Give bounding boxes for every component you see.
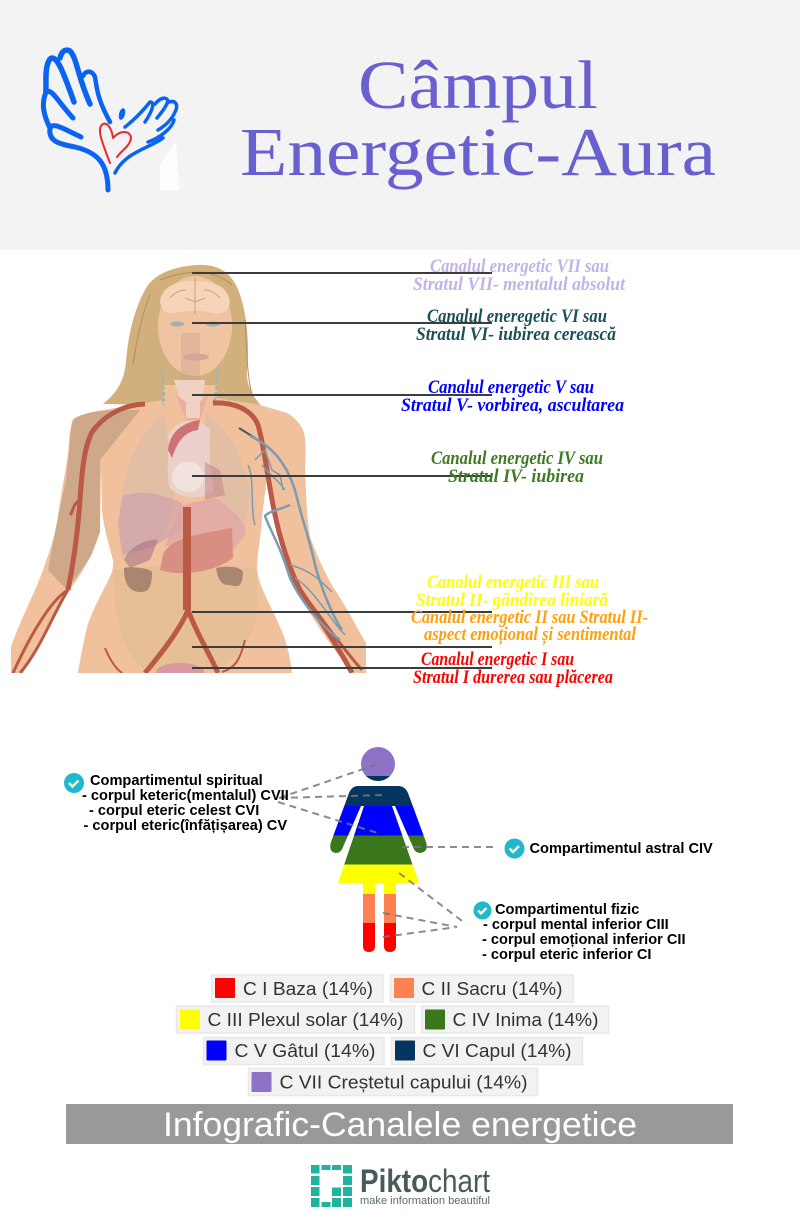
title — [240, 47, 716, 190]
dashed connector lines — [278, 764, 495, 937]
pictogram: woman with colored bands — [330, 747, 427, 952]
legend item C III: C III Plexul solar (14%) — [208, 1010, 404, 1030]
title: Energetic-Aura — [240, 114, 716, 190]
fizic text: Compartimentul fizic — [495, 902, 639, 918]
astral text: Compartimentul astral CIV — [530, 841, 713, 857]
label: canal V: Canalul energetic V sau — [428, 377, 594, 398]
label: canal IV — [431, 448, 603, 487]
callout: compartimentul spiritual — [64, 773, 289, 834]
fizic text: - corpul emoțional inferior CII — [482, 932, 686, 948]
legend item C IV — [422, 1006, 608, 1033]
legend item C VI — [392, 1038, 582, 1064]
spiritual text: Compartimentul spiritual — [90, 773, 263, 789]
icon: check badge — [474, 902, 492, 920]
anatomy figure — [11, 265, 366, 681]
legend item C V: C V Gâtul (14%) — [234, 1041, 376, 1061]
leader lines — [192, 273, 492, 668]
label: canal II — [411, 607, 648, 645]
legend item C I — [212, 975, 383, 1002]
logo: winged hands with heart — [43, 50, 179, 190]
legend item C V — [204, 1038, 384, 1064]
label: canal VI: Canalul eneregetic VI sau — [427, 306, 607, 327]
legend item C III — [176, 1006, 414, 1033]
legend item C VII: C VII Creștetul capului (14%) — [280, 1072, 528, 1092]
legend — [176, 975, 608, 1096]
legend item C II: C II Sacru (14%) — [422, 979, 562, 999]
label: canal VII — [413, 256, 626, 295]
label: canal VI — [416, 306, 616, 345]
legend item C II — [390, 975, 574, 1002]
spiritual text: - corpul keteric(mentalul) CVII — [82, 788, 289, 804]
spiritual text: - corpul eteric celest CVI — [89, 803, 259, 819]
Piktochart logo — [311, 1163, 490, 1207]
legend item C I: C I Baza (14%) — [243, 979, 373, 999]
spiritual text — [82, 773, 289, 834]
label: canal I: Stratul I durerea sau plăcerea — [413, 667, 613, 688]
label: canal III: Stratul II- gândirea liniară — [416, 590, 608, 611]
callout: compartimentul fizic — [474, 902, 686, 963]
label: canal VII: Canalul energetic VII sau — [430, 256, 609, 277]
fizic text — [482, 902, 686, 963]
fizic text: - corpul mental inferior CIII — [483, 917, 669, 933]
fizic text: - corpul eteric inferior CI — [482, 947, 651, 963]
banner: Infografic-Canalele energetice: Infografic-Canalele energetice — [163, 1106, 637, 1144]
logo icon — [311, 1165, 352, 1207]
label: canal VI: Stratul VI- iubirea cerească — [416, 324, 616, 345]
label: canal V: Stratul V- vorbirea, ascultarea — [401, 395, 624, 416]
legend item C IV: C IV Inima (14%) — [452, 1010, 598, 1030]
header background — [0, 0, 800, 250]
icon: check badge — [64, 773, 84, 793]
label: canal IV: Stratul IV- iubirea — [448, 466, 584, 487]
logo wordmark: Piktochart — [360, 1163, 490, 1199]
label: canal V — [401, 377, 624, 416]
label: canal II: Canalul energetic II sau Stratul II- — [411, 607, 648, 628]
icon: check badge — [504, 838, 524, 858]
callout: compartimentul astral — [504, 838, 713, 858]
label: canal I — [413, 649, 613, 688]
label: canal VII: Stratul VII- mentalul absolut — [413, 274, 626, 295]
label: canal III: Canalul energetic III sau — [427, 572, 599, 593]
label: canal II: aspect emoțional și sentimental — [424, 624, 637, 645]
banner: Infografic-Canalele energetice — [66, 1104, 733, 1144]
spiritual text: - corpul eteric(înfățișarea) CV — [84, 818, 287, 834]
legend item C VI: C VI Capul (14%) — [422, 1041, 572, 1061]
logo tagline: make information beautiful — [360, 1195, 490, 1207]
title: Câmpul — [358, 47, 598, 123]
legend item C VII — [248, 1068, 538, 1096]
label: canal IV: Canalul energetic IV sau — [431, 448, 603, 469]
label: canal I: Canalul energetic I sau — [421, 649, 574, 670]
label: canal III — [416, 572, 608, 611]
